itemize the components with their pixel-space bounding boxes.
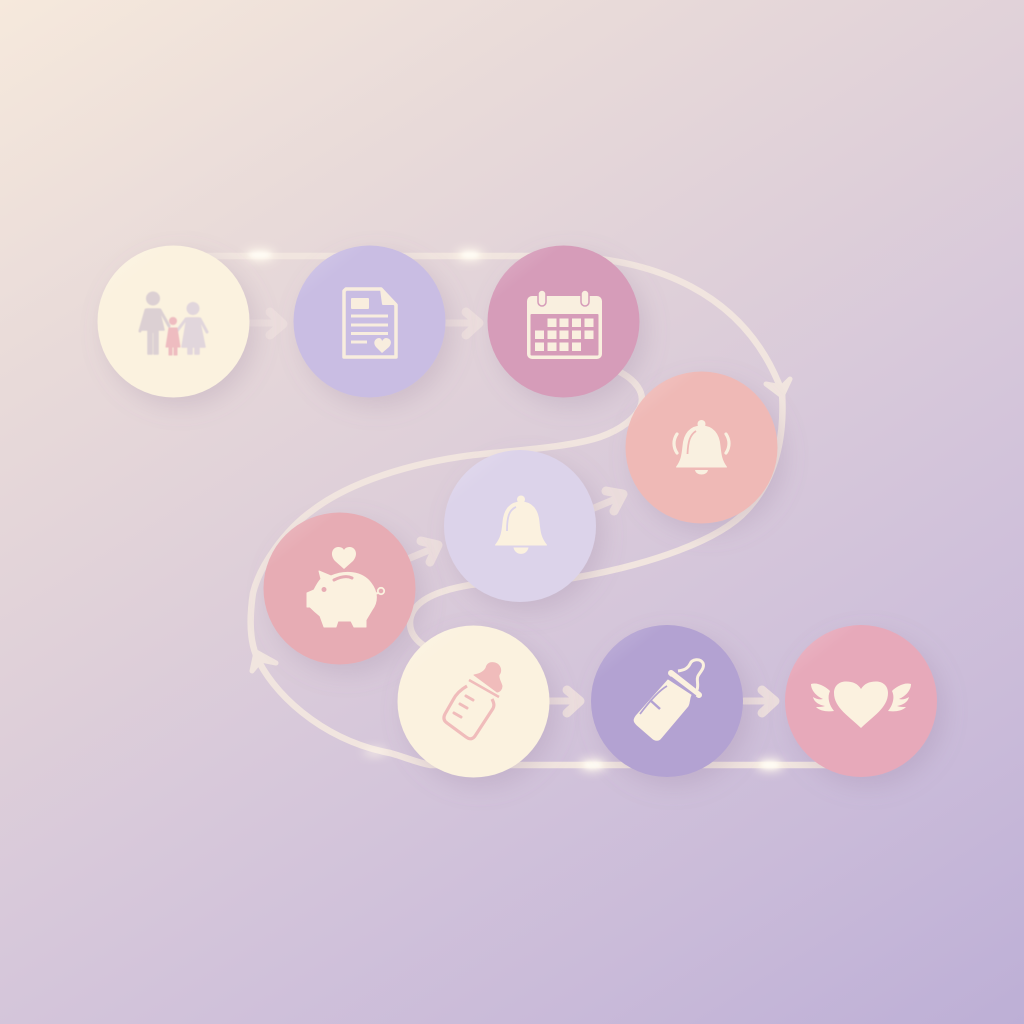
circle 4: ringing bell [626,372,778,524]
connector paths [200,256,840,765]
glow highlights on connector [245,249,784,771]
icon: calendar [527,290,602,359]
arrow 2 [446,312,479,335]
circle 2: document [294,246,446,398]
icon: pink baby bottle [444,663,502,739]
circle 5: bell [444,450,596,602]
icon: winged heart [811,682,911,728]
circle 8: bottle filled [591,625,743,777]
arrow 5 [549,690,580,713]
icon: piggy bank with heart [307,547,384,627]
icon: cream baby bottle [634,660,703,740]
connector arrowhead right [766,379,790,396]
circle 7: bottle outline [398,626,550,778]
icon: bell [496,496,546,554]
icon: ringing bell [674,420,729,474]
arrows between circles [250,312,775,713]
arrow 6 [744,690,775,713]
arrow 3 [594,491,623,511]
connector arrowhead left [252,652,276,671]
arrow 1 [250,312,283,335]
circle 9: heart with wings [785,625,937,777]
circle 3: calendar [488,246,640,398]
icon: document with heart [344,289,396,357]
icon: family [140,292,207,355]
circle 1: family [98,246,250,398]
arrow 4 [410,541,438,562]
circle 6: piggy bank [264,512,416,664]
